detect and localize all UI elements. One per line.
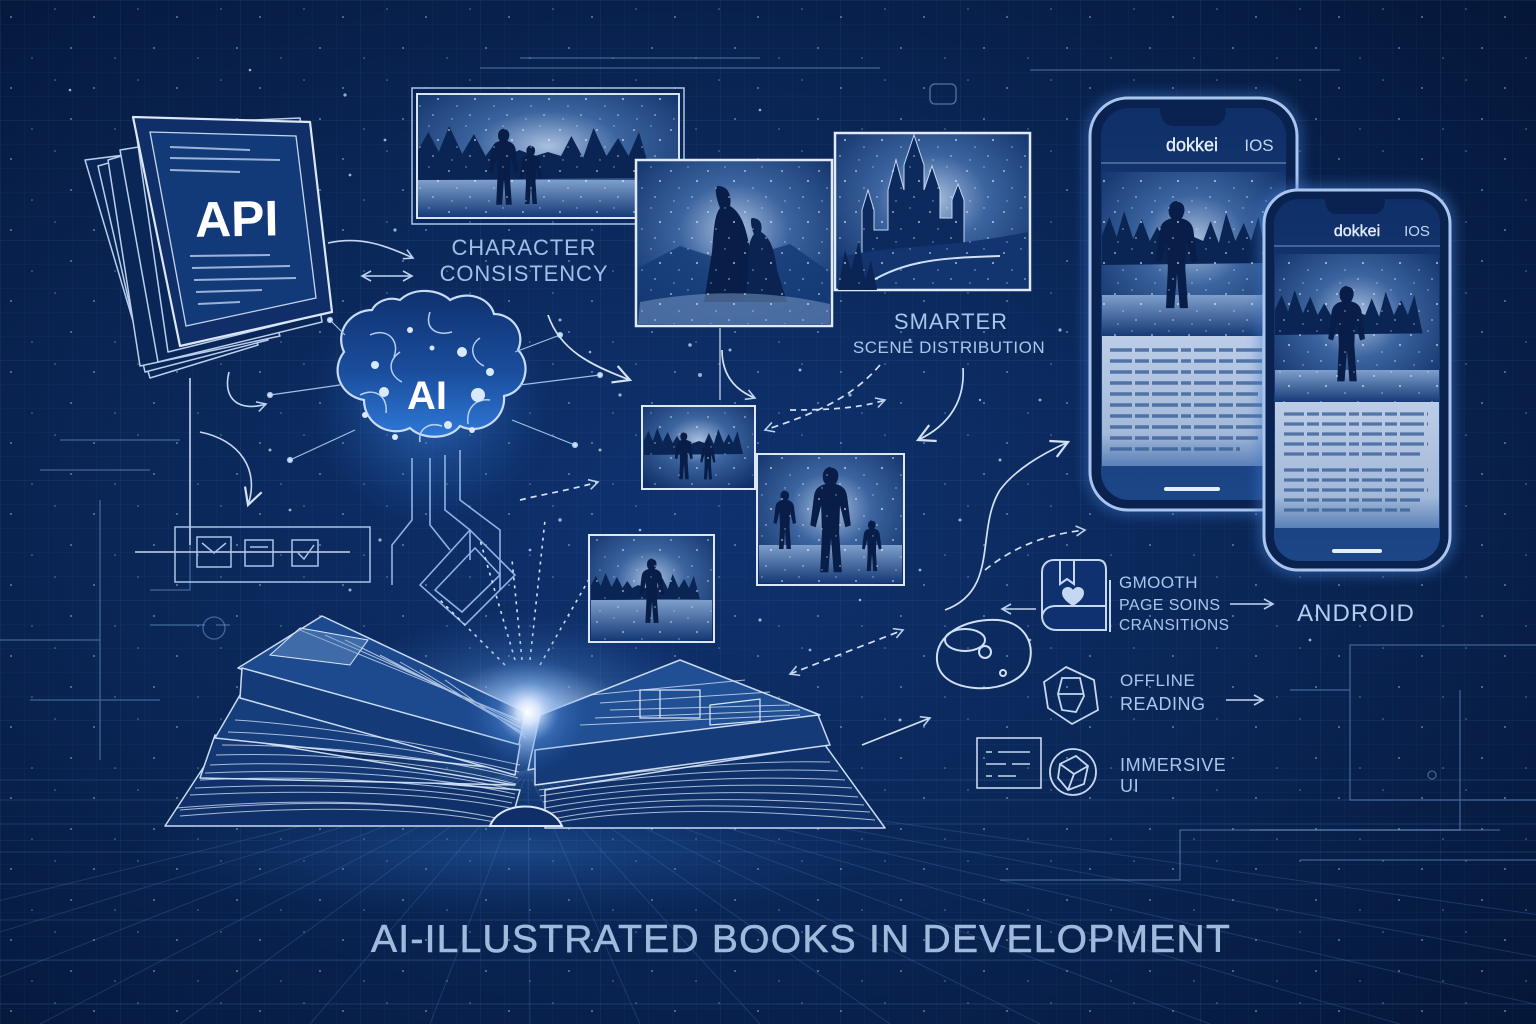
page hatching — [176, 630, 875, 824]
feature: immersive UI: UI — [1120, 776, 1139, 796]
label: smarter scene distribution: SMARTER — [894, 309, 1008, 334]
circuit stem from brain to book — [392, 450, 600, 665]
phone: iOS small — [1258, 184, 1456, 576]
feature: immersive UI — [977, 738, 1226, 796]
image: two robed figures — [636, 160, 832, 326]
image: small silhouettes — [642, 406, 755, 489]
label: dokkei iOS: IOS — [1244, 136, 1274, 155]
label: AI: AI — [407, 374, 447, 418]
label: smarter scene distribution: SCENE DISTRIBUTION — [853, 338, 1045, 357]
label: character consistency: CONSISTENCY — [440, 261, 608, 286]
flow arrows between scenes — [520, 315, 1085, 745]
feature: offline reading: OFFLINE — [1120, 671, 1195, 690]
phone illustration — [1102, 172, 1286, 336]
icon: lens — [937, 620, 1031, 688]
image: group in snow — [589, 535, 714, 642]
arrows around transitions — [1002, 604, 1273, 700]
feature: offline reading — [1044, 667, 1206, 724]
label: dokkei iOS — [1334, 223, 1430, 240]
label: character consistency: CHARACTER — [452, 235, 596, 260]
label: dokkei iOS: dokkei — [1334, 223, 1380, 240]
perspective floor grid — [0, 770, 1536, 1024]
feature: smooth page transitions: PAGE SOINS — [1119, 597, 1221, 614]
label: android: ANDROID — [1297, 600, 1415, 627]
title: AI-ILLUSTRATED BOOKS IN DEVELOPMENT — [371, 918, 1231, 961]
icon: offline hexagon — [1044, 667, 1098, 724]
heading: API: API — [195, 190, 279, 248]
label: dokkei iOS: IOS — [1404, 223, 1430, 240]
label: dokkei iOS: dokkei — [1166, 135, 1218, 155]
feature: smooth page transitions: GMOOTH — [1119, 573, 1198, 592]
brain: AI — [268, 285, 602, 525]
image: figure in storm — [757, 454, 904, 585]
feature: smooth page transitions — [1042, 560, 1229, 634]
icon: cube sphere — [1050, 749, 1096, 795]
workflow boxes — [175, 527, 370, 582]
reading text panel — [1102, 336, 1286, 466]
feature: immersive UI: IMMERSIVE — [1120, 755, 1226, 775]
label: character consistency — [440, 235, 608, 286]
phone: iOS large — [1084, 92, 1303, 516]
image: forest couple scene — [412, 88, 684, 224]
document stack: API — [85, 117, 332, 378]
arrows from API document — [135, 241, 413, 552]
icon: UI panel — [977, 738, 1041, 788]
label: dokkei iOS — [1166, 135, 1274, 155]
feature: smooth page transitions: CRANSITIONS — [1119, 617, 1229, 634]
image: castle — [835, 133, 1030, 290]
reading text panel — [1275, 402, 1439, 528]
floor glow under book — [140, 780, 900, 920]
open book — [165, 610, 885, 828]
feature: offline reading: READING — [1120, 694, 1206, 714]
icon: book heart — [1042, 560, 1110, 632]
scattered star specks — [69, 69, 1311, 721]
label: smarter scene distribution — [853, 309, 1045, 357]
phone illustration — [1275, 254, 1439, 402]
